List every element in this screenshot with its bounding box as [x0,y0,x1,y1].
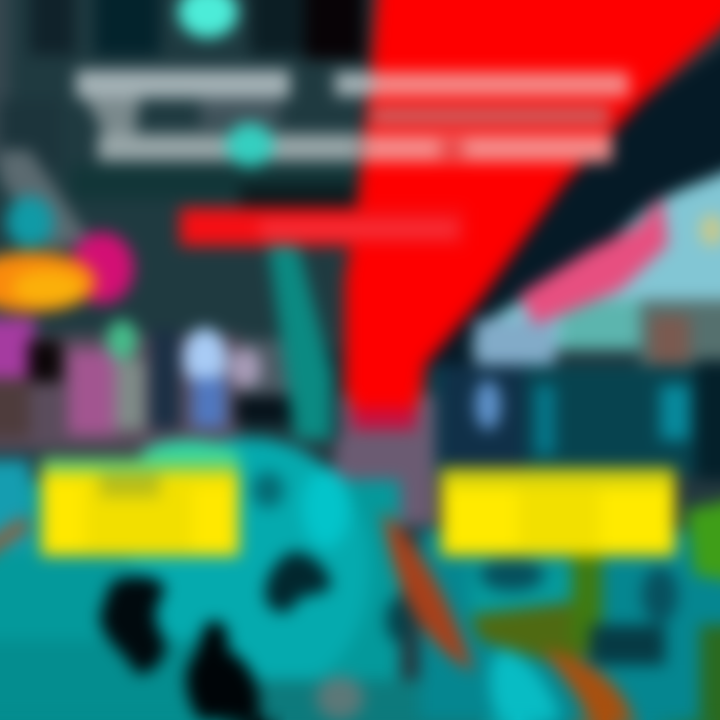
panel: central blue highlight [183,328,261,428]
title: upper line [76,70,629,135]
arrow: brown diagonal streak [382,510,474,672]
panel: right dark diagonal band [425,10,720,385]
icon: left magenta blob [70,232,134,304]
panel: lower right teal field [420,490,720,720]
panel: left colourful figures [0,318,340,450]
subtitle bar [180,208,465,246]
callout: left yellow box [41,458,239,556]
panel: lower right dark teal block [430,360,720,480]
icon: teal column [268,245,332,440]
icon: left teal circle [6,196,54,248]
panel: lower teal field [0,438,420,720]
icon: dark marks on teal field [100,472,410,720]
title: lower line [98,134,612,162]
icon: teal top drop [178,0,238,38]
panel: red triangle [345,0,720,420]
panel: right light blue area [470,150,720,370]
bottom edge base [0,690,720,720]
icon: orange blob [0,252,96,312]
panel: upper left dark backdrop [0,0,380,440]
callout: right yellow box [441,468,675,556]
icon: left brown streak [0,515,30,590]
arrow: lower brown streak [542,650,634,720]
panel: lower middle mauve column [335,355,435,525]
panel: pink ribbon [519,195,668,325]
icon: teal title accent [226,123,274,167]
icon: green mark [106,320,138,360]
icon: cyan bottom blob [490,650,562,720]
